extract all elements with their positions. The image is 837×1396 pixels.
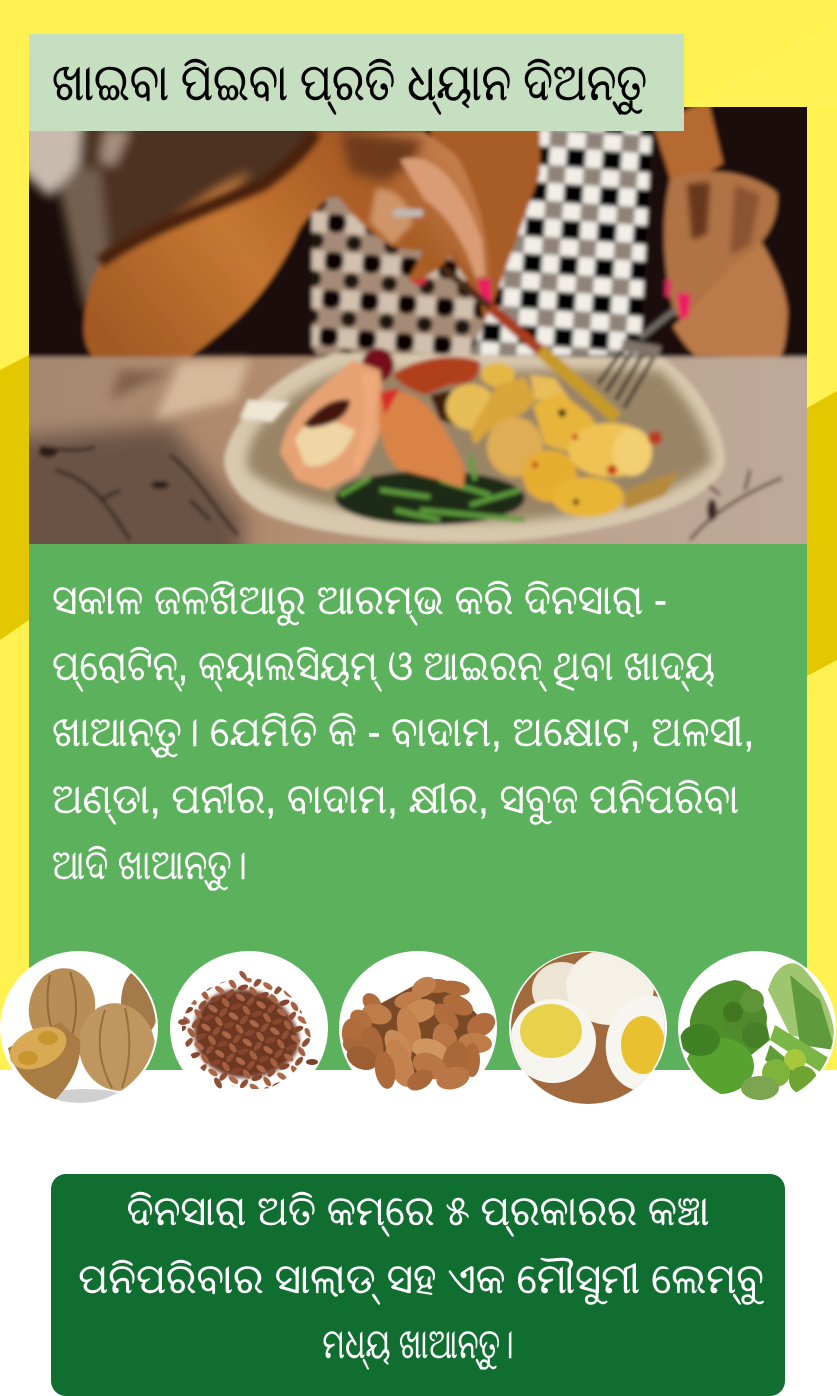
plate (224, 353, 725, 542)
salmon piece (393, 357, 480, 395)
cherry (362, 348, 394, 382)
right arm and hand (653, 100, 787, 358)
title text: ଖାଇବା ପିଇବା ପ୍ରତି ଧ୍ୟାନ ଦିଅନ୍ତୁ (52, 54, 647, 112)
left arm and hand (84, 131, 492, 380)
advice text block: ସକାଳ ଜଳଖିଆରୁ ଆରମ୍ଭ କରି ଦିନସାରା - (52, 576, 667, 623)
icon: boiled eggs (509, 951, 667, 1104)
callout text: ପନିପରିବାର ସାଲାଡ୍ ସହ ଏକ ମୌସୁମୀ ଲେମ୍ବୁ (78, 1255, 764, 1302)
advice text block: ଖାଆନ୍ତୁ। ଯେମିତି କି - ବାଦାମ, ଅକ୍ଷୋଟ, ଅଳସୀ, (52, 708, 754, 755)
greens (335, 455, 525, 525)
callout text: ଦିନସାରା ଅତି କମ୍‌ରେ ୫ ପ୍ରକାରର କଞ୍ଚା (127, 1187, 709, 1234)
backdrop curtain (29, 131, 317, 315)
callout text (78, 1187, 764, 1370)
advice text block: ଆଦି ଖାଆନ୍ତୁ। (52, 841, 247, 888)
icon: green vegetables (678, 951, 836, 1105)
title banner (29, 34, 684, 131)
icon: almonds (339, 951, 499, 1105)
torso skin (428, 131, 545, 323)
checked dress (312, 125, 652, 355)
panel: green advice panel (29, 544, 807, 1070)
photo: woman cutting food on a plate (29, 107, 807, 544)
advice text block (52, 576, 754, 891)
prawn (280, 360, 383, 490)
callout box (51, 1174, 785, 1396)
advice text block: ଅଣ୍ଡା, ପନୀର, ବାଦାମ, କ୍ଷୀର, ସବୁଜ ପନିପରିବା (52, 775, 739, 822)
food (280, 348, 680, 525)
fork (598, 310, 675, 408)
icon: flax seeds (170, 951, 328, 1105)
callout text: ମଧ୍ୟ ଖାଆନ୍ତୁ। (322, 1320, 514, 1367)
table (29, 349, 807, 544)
icon: walnuts (0, 951, 163, 1105)
potatoes (446, 384, 496, 430)
advice text block: ପ୍ରୋଟିନ୍, କ୍ୟାଲସିୟମ୍ ଓ ଆଇରନ୍ ଥିବା ଖାଦ୍ୟ (52, 642, 715, 689)
knife (443, 268, 617, 418)
